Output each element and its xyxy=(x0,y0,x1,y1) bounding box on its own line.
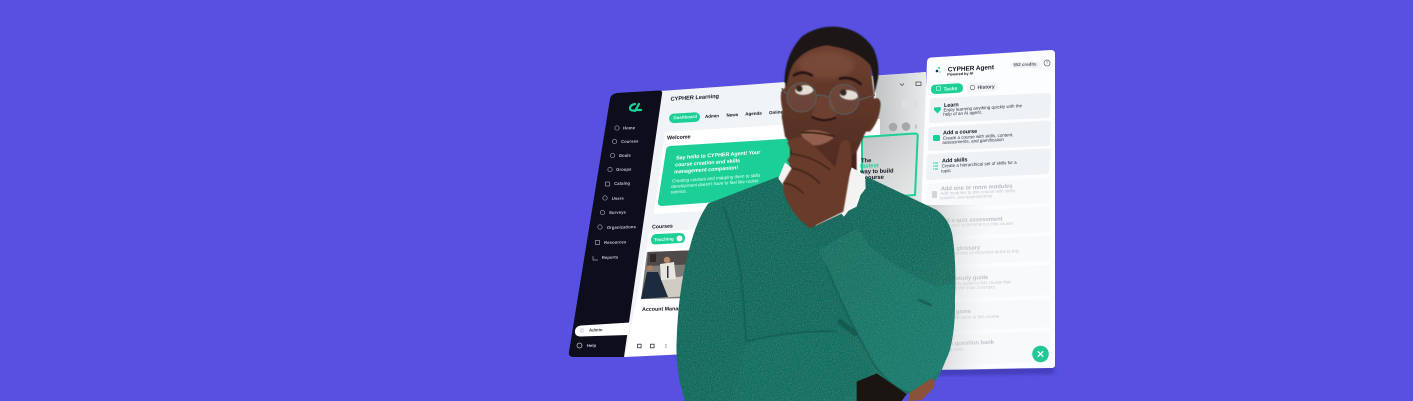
agent sparkle icon xyxy=(936,67,941,73)
title: CYPHER Learning xyxy=(670,94,720,103)
promo text: The xyxy=(861,158,872,164)
promo text: way to build xyxy=(859,168,894,176)
admin pill xyxy=(575,322,630,336)
card: add skills: Add skills xyxy=(942,157,967,164)
faded tasks list: Add one or more modules xyxy=(941,184,1012,192)
main content area xyxy=(622,72,926,357)
welcome card xyxy=(654,119,880,214)
banner text: Say hello to CYPHER Agent! Your xyxy=(676,150,760,161)
promo card xyxy=(862,134,918,199)
card: add skills xyxy=(926,148,1051,180)
sidebar navigation: Users xyxy=(612,196,625,201)
card: add skills: Create a hierarchical set of skills for a xyxy=(942,160,1017,168)
card: add a course: assessments, and gamification xyxy=(942,137,1004,145)
sweater body xyxy=(676,177,955,401)
card: add skills: topic xyxy=(941,168,951,173)
sidebar navigation: Goals xyxy=(619,153,632,158)
faded tasks list: covers all the main concepts xyxy=(938,284,996,291)
person: thinking man xyxy=(676,27,955,401)
tabs: Agenda xyxy=(745,110,762,116)
panel body xyxy=(915,50,1055,370)
head xyxy=(781,27,881,180)
eyebrows xyxy=(794,73,861,84)
card: add a course: Create a course with skills, content, xyxy=(943,132,1014,141)
courses area xyxy=(625,224,790,357)
neck xyxy=(790,140,857,180)
faded tasks list: Add a study guide to this course that xyxy=(938,279,1012,286)
help icon xyxy=(1044,60,1050,66)
logo xyxy=(630,104,641,111)
lips xyxy=(801,130,835,145)
tabs xyxy=(669,109,783,123)
promo text: fastest xyxy=(860,163,879,170)
course title: Account Manager xyxy=(642,306,687,313)
admin label: Admin xyxy=(589,327,603,332)
tabs: Dashboard xyxy=(674,114,697,120)
history tab xyxy=(966,81,999,93)
teaching badge xyxy=(676,236,682,242)
glasses xyxy=(782,83,875,114)
faded tasks list: Add a game xyxy=(938,309,972,316)
faded tasks list: Add a glossary xyxy=(938,245,981,252)
teaching label: Teaching xyxy=(654,236,674,242)
credits: 552 credits xyxy=(1014,61,1037,67)
panel: CYPHER Agent xyxy=(915,50,1055,370)
faded tasks list: Add gamification to this course xyxy=(938,314,1000,320)
teaching pill xyxy=(651,233,685,244)
face xyxy=(782,43,874,168)
card: learn: help of an AI agent. xyxy=(943,110,982,117)
sidebar navigation: Groups xyxy=(616,167,632,172)
admin avatar xyxy=(580,328,584,333)
sweater xyxy=(676,177,955,401)
promo text xyxy=(859,158,894,181)
promo text: a course xyxy=(860,175,885,181)
sweater fold shadows xyxy=(723,207,931,393)
raised forearm xyxy=(808,212,955,393)
faded tasks list: Add a glossary of important terms to this xyxy=(938,249,1020,256)
dark gap under arm xyxy=(857,373,907,401)
eyes xyxy=(795,85,858,101)
help icon: ? xyxy=(1046,61,1049,66)
bottom hand xyxy=(908,378,935,401)
sidebar navigation: Reports xyxy=(602,254,619,260)
finger creases xyxy=(783,154,830,193)
tasks tab xyxy=(931,83,963,94)
lower crossed arm xyxy=(733,331,873,401)
forehead highlight xyxy=(798,52,855,78)
top bar icons in shadow xyxy=(900,82,921,86)
sidebar navigation: Courses xyxy=(621,138,639,144)
faded tasks list: Add a quiz assessment to this course xyxy=(938,221,1014,228)
hair xyxy=(784,27,878,95)
sidebar xyxy=(569,90,662,357)
tabs: News xyxy=(726,112,739,118)
action buttons xyxy=(889,122,916,131)
tabs: Admin xyxy=(705,113,719,119)
card: add a course xyxy=(928,120,1051,151)
faded tasks list: Add modules to this course with skills, xyxy=(940,188,1016,196)
banner text: Creating courses and mapping them to skills xyxy=(672,173,761,183)
banner text: course creation and skills xyxy=(675,158,740,168)
green banner xyxy=(658,138,800,206)
hand on chin xyxy=(783,137,852,228)
faded tasks list xyxy=(922,178,1050,366)
powered by: Powered by AI xyxy=(947,72,973,77)
mouth line xyxy=(801,132,835,137)
faded tasks list: Add a quiz assessment xyxy=(938,217,1003,224)
card: learn xyxy=(929,93,1051,123)
welcome heading: Welcome xyxy=(667,134,691,141)
close button xyxy=(1032,346,1049,362)
tasks label: Tasks xyxy=(944,86,958,93)
bottom toolbar icons xyxy=(638,344,666,348)
course photo xyxy=(641,250,700,299)
help icon xyxy=(577,343,582,348)
shirt collar xyxy=(778,163,866,217)
ears xyxy=(781,88,881,132)
cuff xyxy=(808,212,857,250)
tabs: Online xyxy=(769,109,783,115)
panel: dashboard window xyxy=(569,72,926,357)
sidebar navigation: Catalog xyxy=(614,181,631,186)
history label: History xyxy=(978,84,995,91)
card: learn: Learn xyxy=(944,102,959,109)
card: add a course: Add a course xyxy=(943,129,977,136)
nose xyxy=(812,95,837,120)
filter button xyxy=(901,100,919,108)
history icon xyxy=(970,85,975,90)
nostrils xyxy=(812,117,836,120)
tasks icon xyxy=(936,87,940,90)
right part of dashboard in shadow xyxy=(876,72,926,262)
sidebar navigation: Surveys xyxy=(609,209,627,215)
faded tasks list: Add a study guide xyxy=(938,275,989,282)
banner text: science. xyxy=(670,188,687,194)
sidebar navigation xyxy=(593,125,639,260)
banner text: development doesn't have to feel like rocket xyxy=(671,178,759,189)
sidebar navigation: Organizations xyxy=(607,224,637,230)
panel: shadow under agent panel xyxy=(932,366,1054,376)
credits pill xyxy=(1011,62,1040,68)
sidebar navigation: Resources xyxy=(604,239,627,245)
card: learn: Enjoy learning anything quickly with the xyxy=(944,103,1022,112)
courses heading: Courses xyxy=(652,223,673,230)
banner text xyxy=(670,150,761,194)
faded tasks list: Add a question bank xyxy=(937,340,995,347)
faded tasks list: content, and assessments xyxy=(940,193,993,200)
sidebar navigation: Home xyxy=(623,125,636,130)
shadow cast by person xyxy=(915,205,1000,370)
banner text: management companion! xyxy=(674,165,739,175)
help label: Help xyxy=(587,343,597,348)
faded tasks list: Coming soon xyxy=(937,346,964,352)
agent title: CYPHER Agent xyxy=(948,64,995,73)
